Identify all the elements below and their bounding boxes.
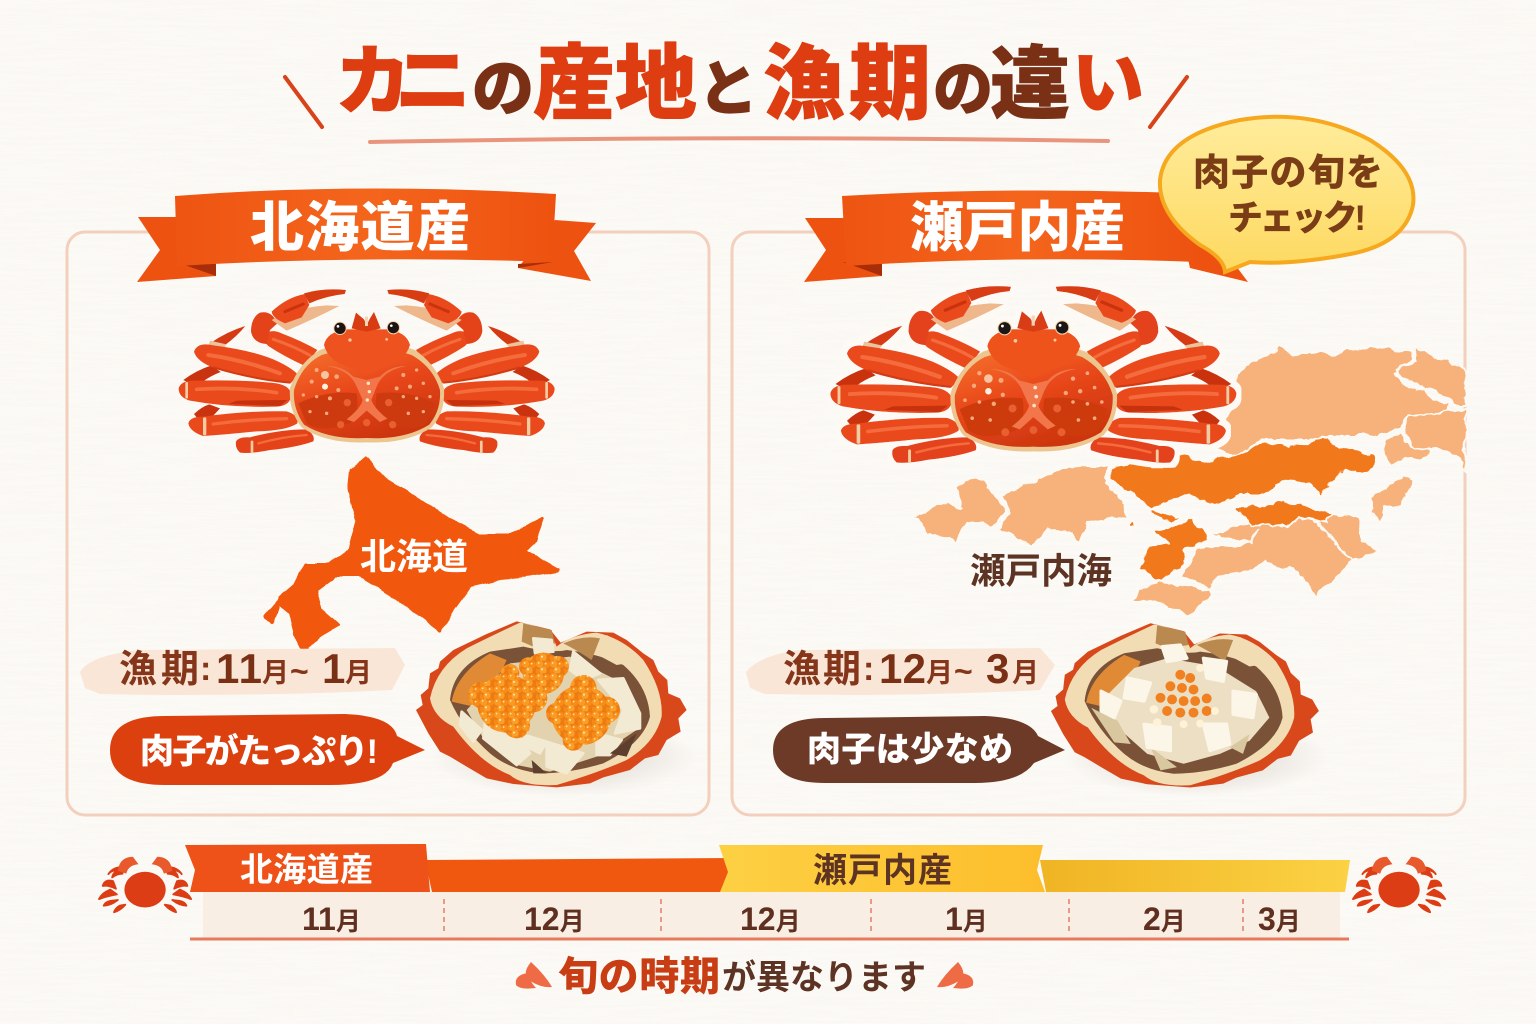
crab illustration bbox=[830, 286, 1236, 463]
ribbon: setouchi: 瀬戸内産 bbox=[910, 198, 1125, 258]
panel frame bbox=[67, 232, 709, 815]
season label: 月 bbox=[926, 658, 953, 688]
icon: leaf right bbox=[937, 962, 973, 989]
title text: と bbox=[698, 56, 758, 123]
season label: 漁期 bbox=[119, 649, 199, 691]
flag: setouchi bbox=[719, 845, 1045, 892]
panel frame bbox=[732, 232, 1465, 815]
month labels: 11月 bbox=[302, 901, 361, 937]
title text bbox=[335, 39, 1144, 130]
title text: 漁期 bbox=[763, 39, 931, 130]
shell with meat bbox=[1051, 623, 1329, 797]
orange bar bbox=[425, 858, 730, 892]
season label bbox=[80, 645, 405, 695]
map: hokkaido bbox=[265, 459, 557, 649]
title text: カニ bbox=[335, 40, 471, 125]
title text: 違 bbox=[990, 40, 1070, 129]
season label: ~ bbox=[954, 653, 973, 689]
month labels bbox=[302, 901, 1301, 937]
season label: 月 bbox=[1012, 658, 1039, 688]
roe bbox=[1156, 670, 1212, 718]
gold bar bbox=[1040, 860, 1350, 892]
title accent stroke left bbox=[285, 77, 322, 127]
panel: setouchi bbox=[732, 190, 1466, 815]
footer note: 旬の時期 bbox=[558, 955, 720, 999]
meat chunks bbox=[1101, 658, 1269, 764]
season label: 月 bbox=[345, 658, 372, 688]
title text: 産地 bbox=[533, 39, 697, 130]
month band bbox=[203, 892, 1340, 938]
meat chunks bbox=[467, 657, 640, 772]
season label bbox=[746, 645, 1055, 695]
flag: hokkaido: 北海道産 bbox=[240, 851, 373, 888]
season label: 3 bbox=[986, 645, 1009, 692]
month labels: 12月 bbox=[740, 901, 801, 937]
callout: 肉子は少なめ bbox=[807, 731, 1013, 769]
footer note bbox=[516, 955, 973, 999]
season label: 12 bbox=[879, 645, 926, 692]
season label: 漁期 bbox=[783, 649, 861, 691]
title text: の bbox=[933, 56, 993, 123]
icon: crab right bbox=[1353, 857, 1445, 912]
callout bbox=[773, 716, 1065, 783]
title accent stroke right bbox=[1150, 77, 1187, 127]
icon: crab left bbox=[99, 857, 191, 912]
season label: : bbox=[863, 650, 874, 688]
callout: check the season: チェック! bbox=[1228, 199, 1366, 238]
title bbox=[285, 39, 1187, 142]
title underline bbox=[370, 138, 1108, 142]
roe clusters bbox=[468, 653, 620, 751]
timeline bbox=[99, 844, 1445, 939]
flag: setouchi: 瀬戸内産 bbox=[813, 852, 952, 890]
map: hokkaido: 北海道 bbox=[360, 536, 468, 577]
month labels: 1月 bbox=[945, 901, 988, 937]
map: setouchi bbox=[911, 347, 1466, 617]
month labels: 2月 bbox=[1143, 901, 1186, 937]
callout: 肉子がたっぷり! bbox=[140, 732, 378, 771]
ribbon: hokkaido: 北海道産 bbox=[250, 198, 470, 258]
label: setouchi sea: 瀬戸内海 bbox=[970, 551, 1112, 591]
flag: hokkaido bbox=[185, 844, 430, 892]
callout: check the season: 肉子の旬を bbox=[1193, 152, 1383, 193]
title text: の bbox=[472, 55, 534, 124]
shell with roe bbox=[416, 621, 697, 797]
season label: ~ bbox=[290, 653, 309, 689]
prefecture borders bbox=[951, 495, 1353, 562]
crab illustration bbox=[179, 289, 555, 453]
panel: hokkaido bbox=[67, 188, 709, 815]
callout bbox=[110, 714, 425, 785]
baseline bbox=[190, 938, 1349, 940]
callout: check the season bbox=[1160, 117, 1413, 272]
month labels: 3月 bbox=[1258, 901, 1301, 937]
footer note: が異なります bbox=[722, 958, 926, 997]
ribbon: setouchi bbox=[804, 190, 1248, 282]
season label: 月 bbox=[262, 658, 289, 688]
month dividers bbox=[444, 899, 1243, 933]
season label: : bbox=[200, 650, 211, 688]
dark gaps bbox=[532, 733, 637, 773]
title text: い bbox=[1072, 44, 1144, 124]
month labels: 12月 bbox=[524, 901, 585, 937]
season label: 1 bbox=[322, 645, 345, 692]
season label: 11 bbox=[216, 645, 262, 692]
ribbon: hokkaido bbox=[137, 188, 596, 282]
icon: leaf left bbox=[516, 962, 552, 989]
